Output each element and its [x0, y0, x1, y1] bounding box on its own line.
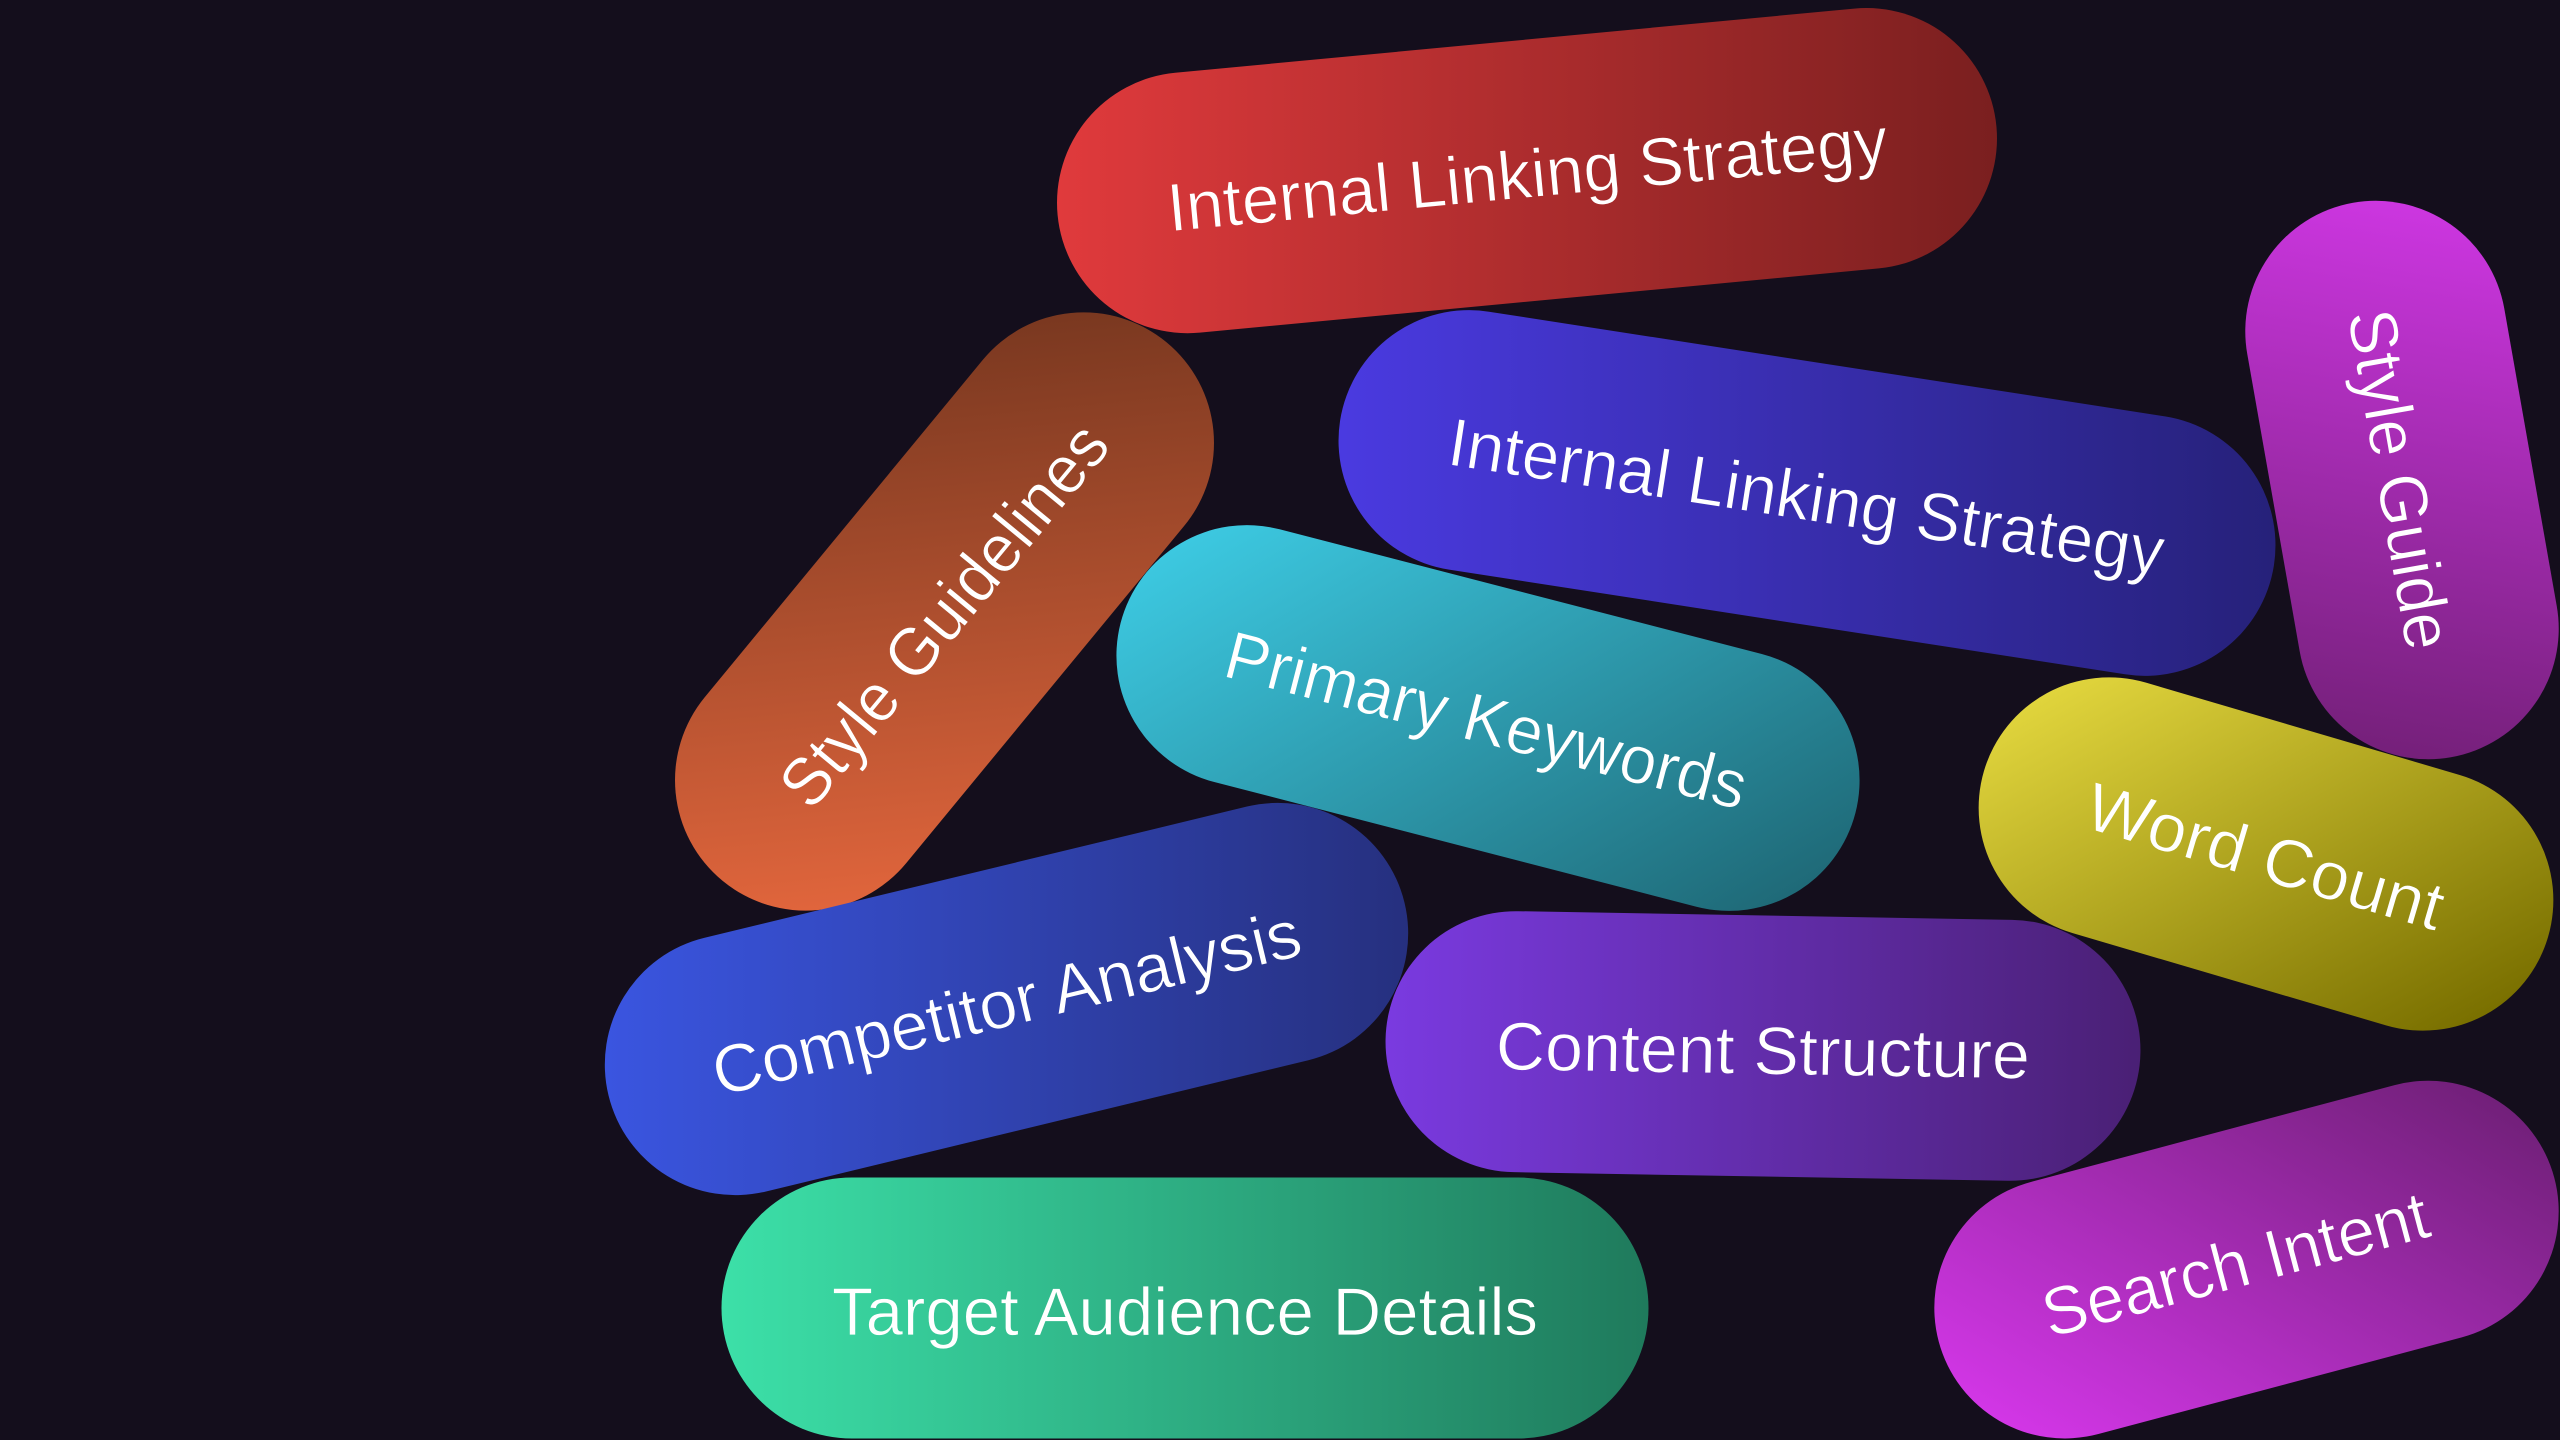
pill: Style Guide [2225, 180, 2560, 780]
pill: Internal Linking Strategy (red) [1045, 0, 2009, 345]
pill: Competitor Analysis: Competitor Analysis [704, 895, 1308, 1111]
pill: Internal Linking Strategy (indigo) [1320, 292, 2294, 694]
pill: Primary Keywords [1088, 497, 1888, 939]
pill: Content Structure [1383, 909, 2143, 1183]
pill: Word Count [1947, 646, 2560, 1062]
pill: Search Intent: Search Intent [2034, 1177, 2437, 1352]
pill: Style Guide: Style Guide [2333, 303, 2467, 655]
pill: Competitor Analysis [578, 776, 1435, 1222]
pill: Primary Keywords: Primary Keywords [1217, 617, 1755, 825]
pill: Content Structure: Content Structure [1495, 1008, 2031, 1094]
pill: Internal Linking Strategy (indigo): Internal Linking Strategy [1443, 404, 2169, 590]
pill: Target Audience Details [722, 1178, 1648, 1438]
pill: Search Intent [1905, 1052, 2560, 1440]
pill: Target Audience Details: Target Audience Details [832, 1274, 1538, 1350]
pill: Style Guidelines [622, 259, 1267, 964]
pill: Word Count: Word Count [2077, 768, 2453, 945]
pill: Internal Linking Strategy (red): Internal Linking Strategy [1164, 103, 1891, 246]
pill: Style Guidelines: Style Guidelines [764, 408, 1124, 822]
